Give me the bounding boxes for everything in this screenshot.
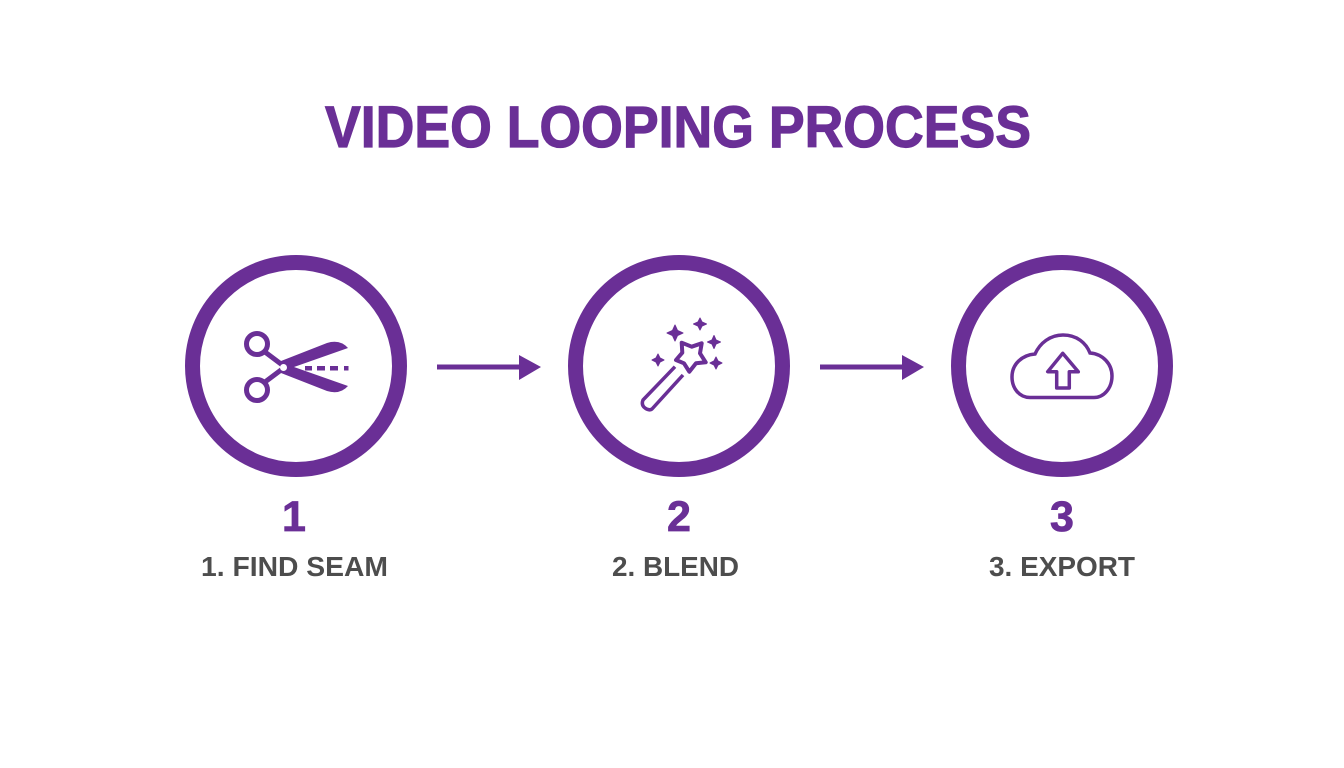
- step 3 circle: [958, 262, 1166, 470]
- icon: magic wand: [642, 318, 722, 410]
- step 2 circle: [576, 262, 782, 470]
- arrow: step 2 to step 3: [820, 355, 924, 380]
- arrow: step 1 to step 2: [437, 355, 541, 380]
- step 1 circle: [192, 262, 400, 470]
- step 1 label: 1. FIND SEAM: [201, 551, 388, 582]
- step 2 number: 2: [667, 493, 691, 541]
- step 3: export: [958, 262, 1166, 582]
- title: VIDEO LOOPING PROCESS: [325, 95, 1031, 160]
- step 3 number: 3: [1050, 493, 1074, 541]
- step 2 label: 2. BLEND: [612, 551, 739, 582]
- icon: cloud upload: [1012, 335, 1112, 398]
- step 1: find seam: [192, 262, 400, 582]
- step 2: blend: [576, 262, 782, 582]
- step 3 label: 3. EXPORT: [989, 551, 1135, 582]
- icon: scissors: [246, 334, 348, 400]
- step 1 number: 1: [282, 493, 306, 541]
